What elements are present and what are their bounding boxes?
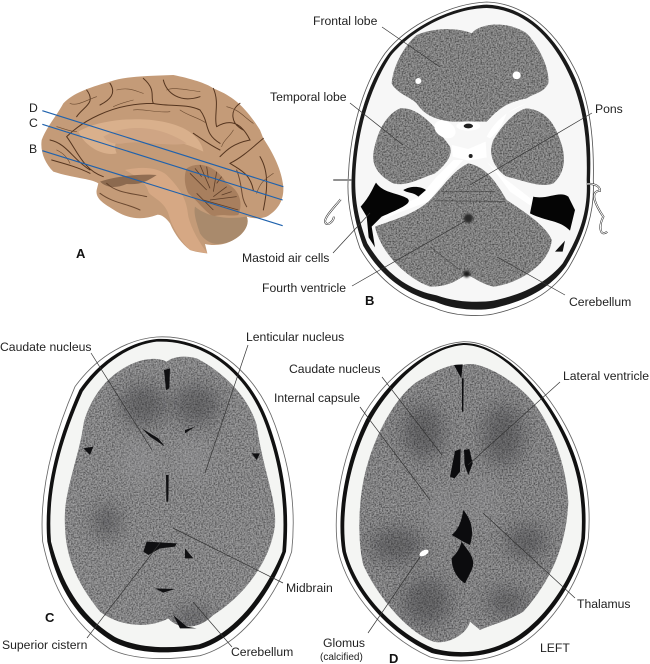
label: Pons: Pons: [595, 102, 623, 116]
label: Lateral ventricle: Lateral ventricle: [563, 369, 649, 383]
label: Caudate nucleus: Caudate nucleus: [0, 340, 91, 354]
label: LEFT: LEFT: [540, 641, 570, 655]
label: Cerebellum: Cerebellum: [231, 645, 293, 659]
plane lines D C B: [42, 111, 283, 226]
panel C: CT through midbrain: [0, 330, 344, 659]
panel letter C: C: [45, 610, 55, 625]
CT head B: [325, 2, 607, 316]
plane labels: D: [29, 101, 38, 115]
label: Frontal lobe: Frontal lobe: [313, 14, 378, 28]
label: Lenticular nucleus: [205, 330, 344, 473]
label: Lateral ventricle: [468, 369, 649, 465]
panel A: brain sagittal section: [29, 75, 283, 261]
label: Glomus (calcified): (calcified): [320, 652, 363, 663]
plane labels: [29, 101, 38, 156]
label: Mastoid air cells: Mastoid air cells: [242, 251, 329, 265]
CT head D: [336, 342, 589, 661]
label: Lenticular nucleus: Lenticular nucleus: [246, 330, 344, 344]
label: Cerebellum: [193, 602, 293, 659]
label: Superior cistern: [2, 543, 160, 652]
panel B: CT through pons: [242, 2, 631, 316]
label: Thalamus: [483, 513, 631, 611]
label: Internal capsule: [274, 391, 430, 500]
label: Caudate nucleus: [289, 362, 442, 455]
label: Glomus (calcified): Glomus: [323, 636, 365, 650]
panel letter B: B: [365, 293, 374, 308]
label: Mastoid air cells: [242, 213, 370, 265]
CT head C: [42, 337, 293, 659]
label: Caudate nucleus: Caudate nucleus: [289, 362, 380, 376]
label: Superior cistern: Superior cistern: [2, 638, 87, 652]
label: Temporal lobe: Temporal lobe: [270, 90, 347, 104]
label: Fourth ventricle: [262, 220, 467, 295]
label: Midbrain: [173, 528, 333, 595]
label: Glomus (calcified): [320, 557, 420, 663]
label: Thalamus: Thalamus: [577, 597, 631, 611]
plane labels: B: [29, 142, 37, 156]
label: Fourth ventricle: Fourth ventricle: [262, 281, 346, 295]
label: Cerebellum: [497, 257, 631, 309]
label: Caudate nucleus: [0, 340, 152, 450]
label: Cerebellum: Cerebellum: [569, 295, 631, 309]
panel D: CT through lateral ventricles: [274, 342, 649, 664]
label: Midbrain: Midbrain: [286, 581, 333, 595]
label: Pons: [470, 102, 623, 185]
plane labels: C: [29, 116, 38, 130]
label: Temporal lobe: [270, 90, 403, 145]
brain specimen: [41, 75, 283, 253]
label: Frontal lobe: [313, 14, 440, 67]
panel letter A: A: [76, 246, 86, 261]
label: Internal capsule: Internal capsule: [274, 391, 360, 405]
